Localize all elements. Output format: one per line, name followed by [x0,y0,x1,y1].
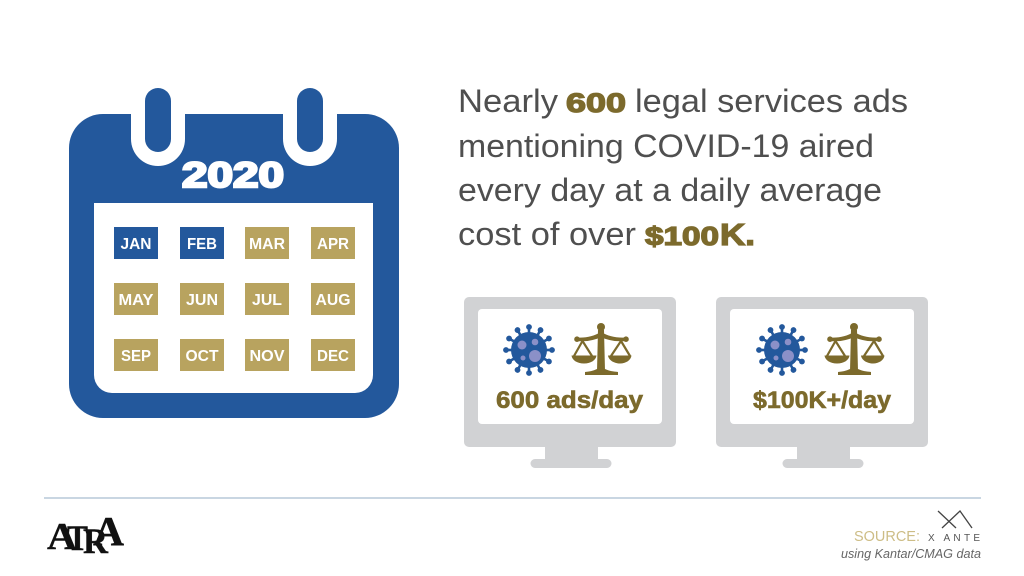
right binder ring [283,88,337,166]
data note: using Kantar/CMAG data [841,547,981,561]
months [114,227,355,371]
monitor frame [464,297,676,447]
months: MAR [249,236,285,253]
months: FEB [187,236,217,253]
icon: scales of justice [824,323,884,375]
months: MAY [118,292,154,309]
source label: SOURCE: [854,529,920,545]
monitor: $100K+ per day [716,297,928,468]
calendar [69,88,399,418]
ATRA logo: A [93,508,124,554]
X Ante name: X ANTE [928,533,980,544]
monitor frame [716,297,928,447]
months: NOV [250,348,285,365]
months: JUN [186,292,218,309]
monitor: 600 ads per day [464,297,676,468]
monitor stand [530,447,612,468]
headline text: legal services ads [635,83,908,119]
headline text: mentioning COVID-19 aired [458,128,874,164]
monitor screen [478,309,662,424]
months: JAN [120,236,152,253]
left binder ring [131,88,185,166]
icon: virus [756,324,808,376]
monitor stand [782,447,864,468]
label: $100K+/day: $100K+/day [753,387,892,414]
months: AUG [316,292,350,309]
monitor screen [730,309,914,424]
headline text: 600 [566,88,626,118]
months: APR [317,236,349,253]
headline text: cost of over [458,216,636,252]
ATRA logo [47,508,124,561]
months: SEP [121,348,151,365]
calendar body [69,114,399,418]
label: 600 ads/day: 600 ads/day [496,387,644,414]
headline text: $100 [645,221,719,251]
months: DEC [317,348,349,365]
headline text [458,83,908,252]
month grid panel [94,203,373,393]
calendar year: 2020 [182,156,284,195]
ATRA logo: R [83,521,109,561]
headline text: K. [720,217,755,252]
source [841,511,981,561]
headline text: every day at a daily average [458,172,882,208]
months: JUL [252,292,282,309]
ATRA logo: T [67,518,88,558]
ATRA logo: A [47,516,78,558]
icon: virus [503,324,555,376]
headline text: Nearly [458,83,558,119]
icon: scales of justice [572,323,632,375]
months: OCT [186,348,219,365]
X Ante logo mark [938,511,972,528]
